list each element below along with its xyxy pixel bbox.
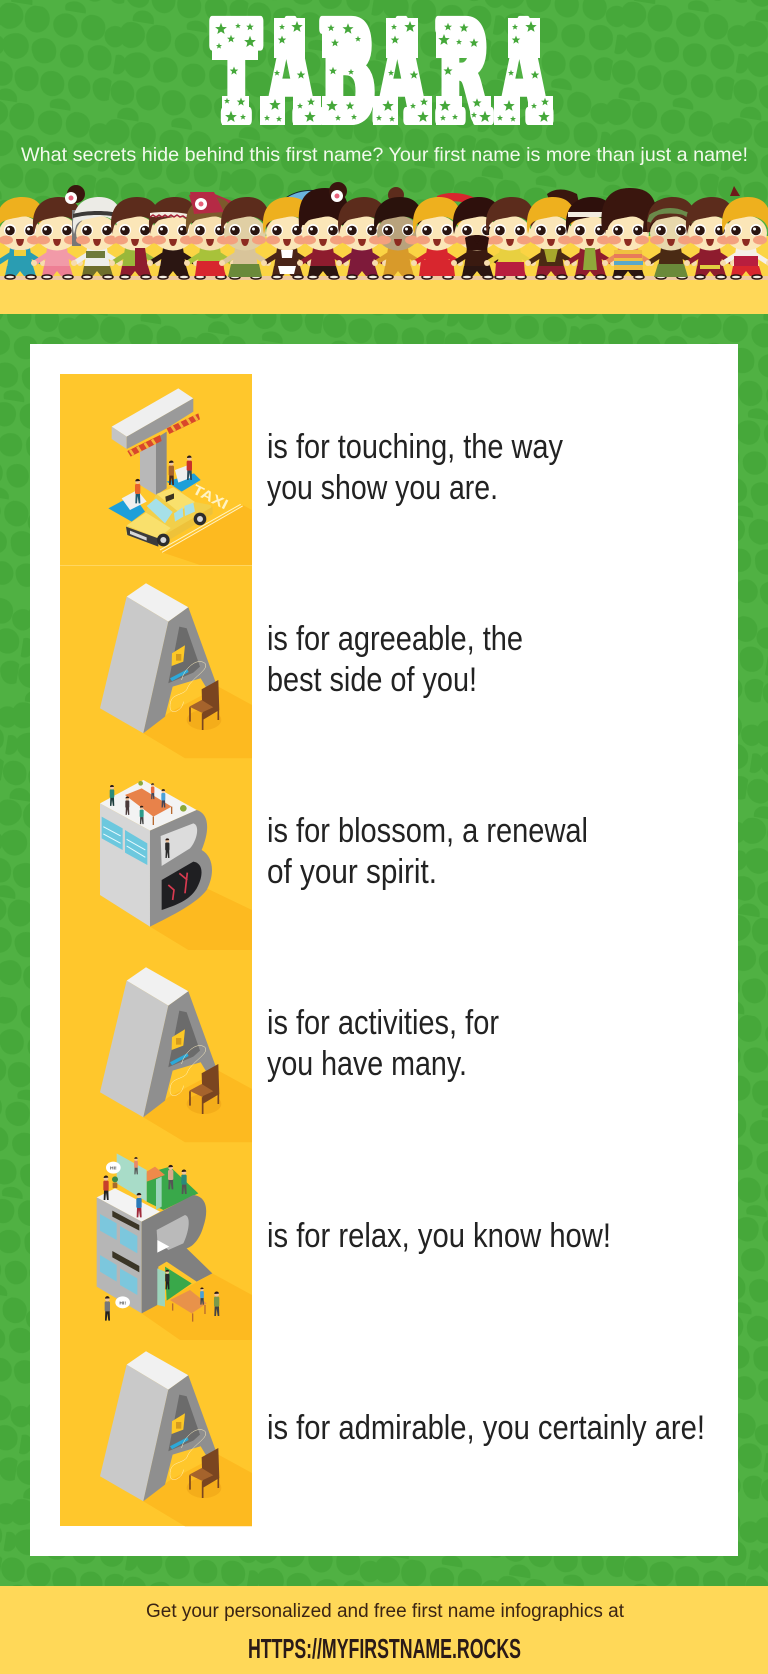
text: A line: is for activities, for <box>267 1004 499 1042</box>
footer text: Get your personalized and free first name infographics at <box>146 1601 625 1622</box>
text: T line: is for touching, the way <box>267 428 563 466</box>
icon: isometric letter B with rooftop meeting <box>100 780 252 950</box>
row 6: letter A <box>100 1351 705 1526</box>
text: A line: is for agreeable, the <box>267 620 523 658</box>
icon: isometric letter A with chair <box>100 583 252 758</box>
icon: isometric letter A with chair <box>100 1351 252 1526</box>
text: A line: best side of you! <box>267 661 477 699</box>
letter column <box>60 374 252 1526</box>
footer <box>0 1586 768 1674</box>
subtitle: What secrets hide behind this first name? Your first name is more than just a name! <box>21 144 748 166</box>
text: R line: is for relax, you know how! <box>267 1217 611 1255</box>
panel: white card <box>30 344 738 1556</box>
icon: isometric letter R with office people: Hi! <box>119 1300 126 1306</box>
row 1: letter T <box>108 388 563 565</box>
row 2: letter A <box>100 583 523 758</box>
row 4: letter A <box>100 967 499 1142</box>
icon: isometric letter T with taxi: TAXI <box>190 481 231 512</box>
text: B line: of your spirit. <box>267 853 437 891</box>
text: A line: you have many. <box>267 1045 467 1083</box>
text: T line: you show you are. <box>267 469 498 507</box>
icon: isometric letter T with taxi <box>108 388 252 565</box>
icon: isometric letter A with chair <box>100 967 252 1142</box>
text: A line: is for admirable, you certainly are! <box>267 1409 705 1447</box>
row 5: letter R <box>97 1153 611 1340</box>
text: B line: is for blossom, a renewal <box>267 812 588 850</box>
footer url: HTTPS://MYFIRSTNAME.ROCKS <box>248 1633 521 1664</box>
icon: isometric letter R with office people: Hi! <box>110 1166 117 1172</box>
banner: row of cartoon children <box>0 182 768 314</box>
icon: isometric letter R with office people <box>97 1153 252 1340</box>
row 3: letter B <box>100 780 588 950</box>
